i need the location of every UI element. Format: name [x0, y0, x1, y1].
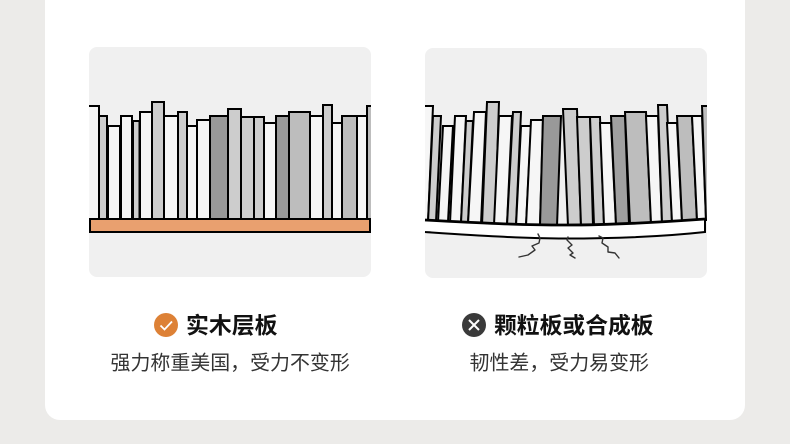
crack lines [519, 234, 619, 258]
icon: dark cross [462, 313, 486, 337]
panel background left [89, 47, 371, 277]
panel background right [425, 48, 707, 278]
panel: solid wood shelf [80, 47, 379, 277]
panel: bending particle board shelf [415, 48, 715, 278]
sagging white board [425, 219, 705, 238]
icon: orange check [154, 313, 178, 337]
books on sagging shelf [415, 102, 715, 226]
books on solid wood shelf [80, 102, 379, 220]
orange shelf board [90, 219, 370, 232]
caption: particle board [462, 312, 654, 374]
description: particle board: 韧性差，受力易变形 [470, 352, 649, 374]
heading: particle board: 颗粒板或合成板 [494, 312, 654, 338]
caption: solid wood [110, 312, 350, 374]
description: solid wood: 强力称重美国，受力不变形 [110, 352, 350, 374]
heading: solid wood board: 实木层板 [186, 312, 278, 338]
